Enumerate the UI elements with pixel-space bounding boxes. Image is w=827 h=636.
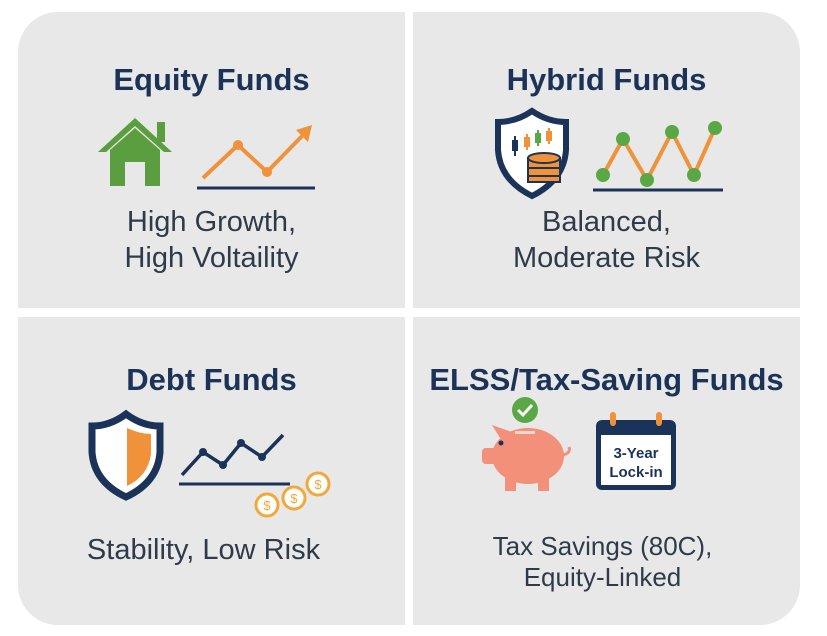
icon: calendar: 3-Year <box>613 445 659 462</box>
chart: debt line <box>179 435 290 484</box>
body text: equity <box>124 206 299 274</box>
icon: calendar: Lock-in <box>609 464 663 481</box>
icon: coins: $ <box>290 491 298 506</box>
body text: elss: Equity-Linked <box>524 562 681 592</box>
body text: hybrid <box>513 206 700 274</box>
heading: elss funds: ELSS/Tax-Saving Funds <box>429 362 784 397</box>
icon: debt shield <box>92 414 160 497</box>
heading: hybrid funds: Hybrid Funds <box>507 62 706 97</box>
chart: hybrid zigzag <box>593 121 723 190</box>
icon: calendar <box>596 412 676 490</box>
panel: equity funds <box>18 12 405 308</box>
panel: debt funds <box>18 317 405 625</box>
icon: coins <box>256 473 329 516</box>
icon: coins: $ <box>314 477 322 492</box>
body text: hybrid: Balanced, <box>542 206 671 238</box>
body text: elss: Tax Savings (80C), <box>493 531 712 561</box>
body text: equity: High Growth, <box>127 206 296 238</box>
body text: elss <box>493 531 712 592</box>
icon: coins: $ <box>263 498 271 513</box>
panel: hybrid funds <box>413 12 800 308</box>
heading: equity funds: Equity Funds <box>113 62 310 97</box>
body text: equity: High Voltaility <box>124 242 299 274</box>
icon: hybrid shield <box>498 111 566 196</box>
body text: hybrid: Moderate Risk <box>513 242 700 274</box>
panel: elss funds <box>413 317 800 625</box>
heading: debt funds: Debt Funds <box>126 362 297 397</box>
chart: equity growth <box>197 125 315 188</box>
body text: debt: Stability, Low Risk <box>87 534 320 566</box>
icon: piggy bank <box>482 397 569 491</box>
icon: house <box>98 118 172 186</box>
